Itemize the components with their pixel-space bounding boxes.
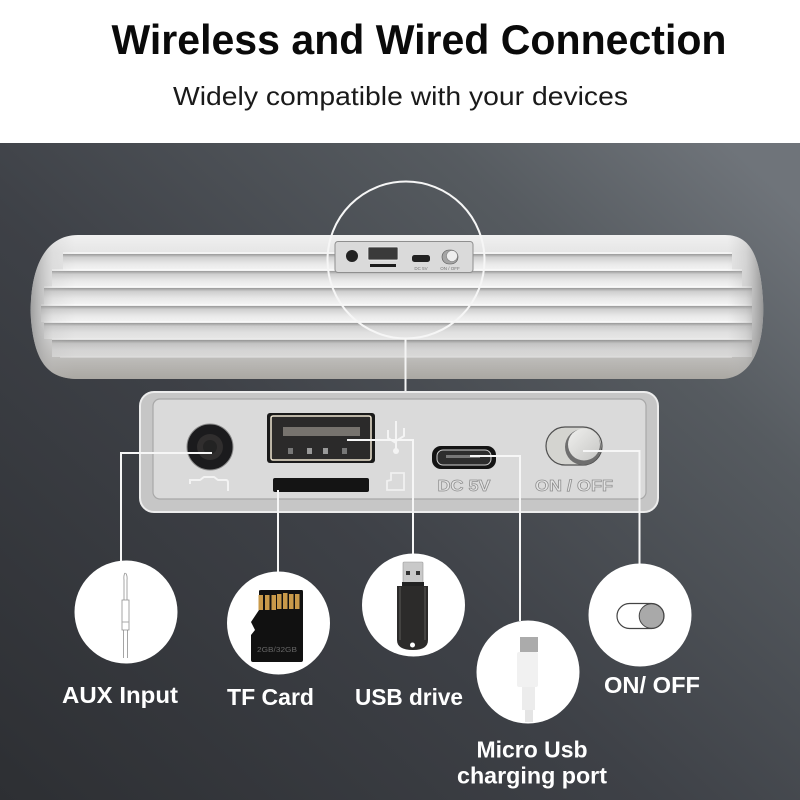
label: dc 5v: DC 5V (438, 478, 491, 495)
leader line: micro usb (470, 456, 520, 621)
icon: usb port (267, 413, 404, 463)
label: tf card: TF Card (227, 684, 314, 710)
speaker body with ridges (31, 235, 764, 379)
icon circle: usb drive (362, 554, 465, 656)
label: micro usb charging port: charging port (457, 762, 607, 788)
icon: aux jack (187, 424, 233, 491)
label: aux input: AUX Input (62, 682, 178, 708)
icon: tf card slot (273, 473, 404, 492)
label: on off: ON/ OFF (604, 672, 700, 698)
icon circle: micro usb cable (476, 620, 580, 724)
label: micro usb charging port: Micro Usb (476, 736, 588, 762)
label: micro usb charging port (457, 736, 607, 788)
label: usb drive: USB drive (355, 684, 463, 710)
leader line: aux (121, 453, 212, 561)
leader line: switch (583, 451, 640, 564)
title: Wireless and Wired Connection (112, 16, 726, 63)
small port panel on speaker: ON / OFF (440, 266, 460, 271)
label: on off: ON / OFF (535, 478, 613, 495)
leader line: tf card (277, 490, 279, 573)
magnifier circle (328, 182, 484, 338)
icon: power switch (546, 427, 602, 465)
subtitle: Widely compatible with your devices (173, 81, 628, 111)
icon circle: tf card: 2GB/32GB (257, 647, 297, 654)
icon circle: tf card (227, 572, 330, 674)
small port panel on speaker: DC 5V (414, 266, 428, 271)
icon: micro usb port (432, 446, 496, 469)
icon circle: on off switch (588, 564, 692, 666)
icon circle: aux cable (74, 560, 178, 664)
small port panel on speaker (335, 242, 473, 272)
leader line: usb (347, 440, 413, 554)
connector leader line: magnifier to panel (404, 338, 406, 392)
enlarged port panel (140, 392, 658, 512)
